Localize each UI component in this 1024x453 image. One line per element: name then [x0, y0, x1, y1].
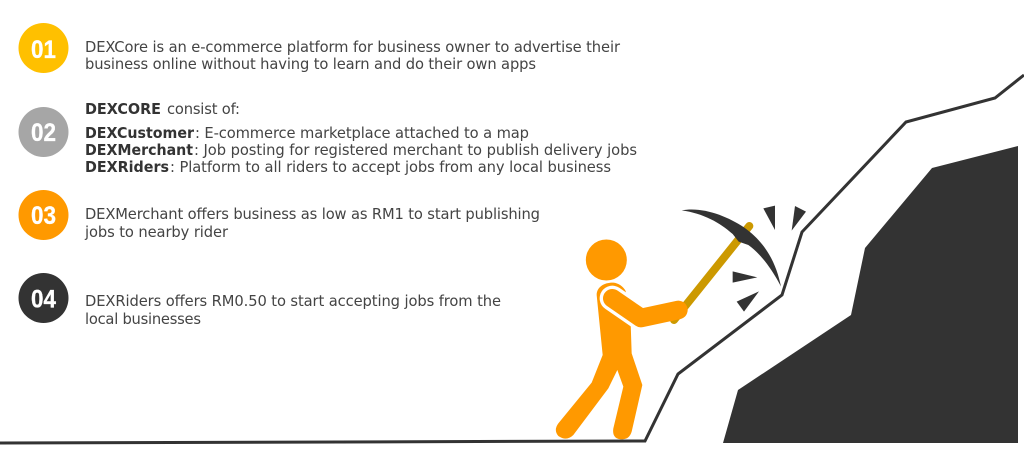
item 01 [18, 23, 621, 73]
item 03 [18, 190, 540, 241]
badge 02: 02 [31, 119, 56, 147]
body and legs [556, 283, 642, 439]
badge 03 [18, 190, 68, 240]
text 04: local businesses [85, 311, 201, 328]
pickaxe head [682, 210, 781, 287]
item 02 [18, 101, 637, 176]
item 04 [18, 273, 501, 328]
text 04: DEXRiders offers RM0.50 to start accepting jobs from the [85, 293, 501, 310]
text 02: DEXCustomer [85, 125, 195, 142]
text 02: : Platform to all riders to accept jobs from any local business [170, 159, 611, 176]
text 02 [85, 101, 637, 176]
text 02: DEXMerchant [85, 142, 193, 159]
text 02: : Job posting for registered merchant to publish delivery jobs [194, 142, 637, 159]
text 03: jobs to nearby rider [84, 224, 229, 241]
badge 01: 01 [31, 36, 56, 64]
text 01: DEXCore is an e-commerce platform for business owner to advertise their [85, 39, 621, 56]
text 03: DEXMerchant offers business as low as RM1 to start publishing [85, 206, 540, 223]
text 02: DEXCORE [85, 101, 161, 118]
badge 03: 03 [31, 202, 56, 230]
badge 04 [18, 273, 68, 323]
text 02: DEXRiders [85, 159, 169, 176]
text 02: consist of: [167, 101, 240, 118]
text 02: : E-commerce marketplace attached to a map [195, 125, 529, 142]
badge 04: 04 [31, 286, 56, 314]
head [586, 239, 627, 280]
miner figure with pickaxe [556, 206, 806, 439]
pickaxe handle [674, 226, 749, 320]
arm outline [612, 298, 641, 318]
text 03 [84, 206, 540, 241]
text 04 [85, 293, 501, 328]
badge 02 [18, 107, 68, 157]
rock shards [733, 206, 806, 312]
text 01 [85, 39, 621, 73]
badge 01 [18, 23, 68, 73]
mountain silhouette [723, 146, 1018, 443]
arm [612, 298, 678, 318]
text 01: business online without having to learn and do their own apps [85, 56, 536, 73]
